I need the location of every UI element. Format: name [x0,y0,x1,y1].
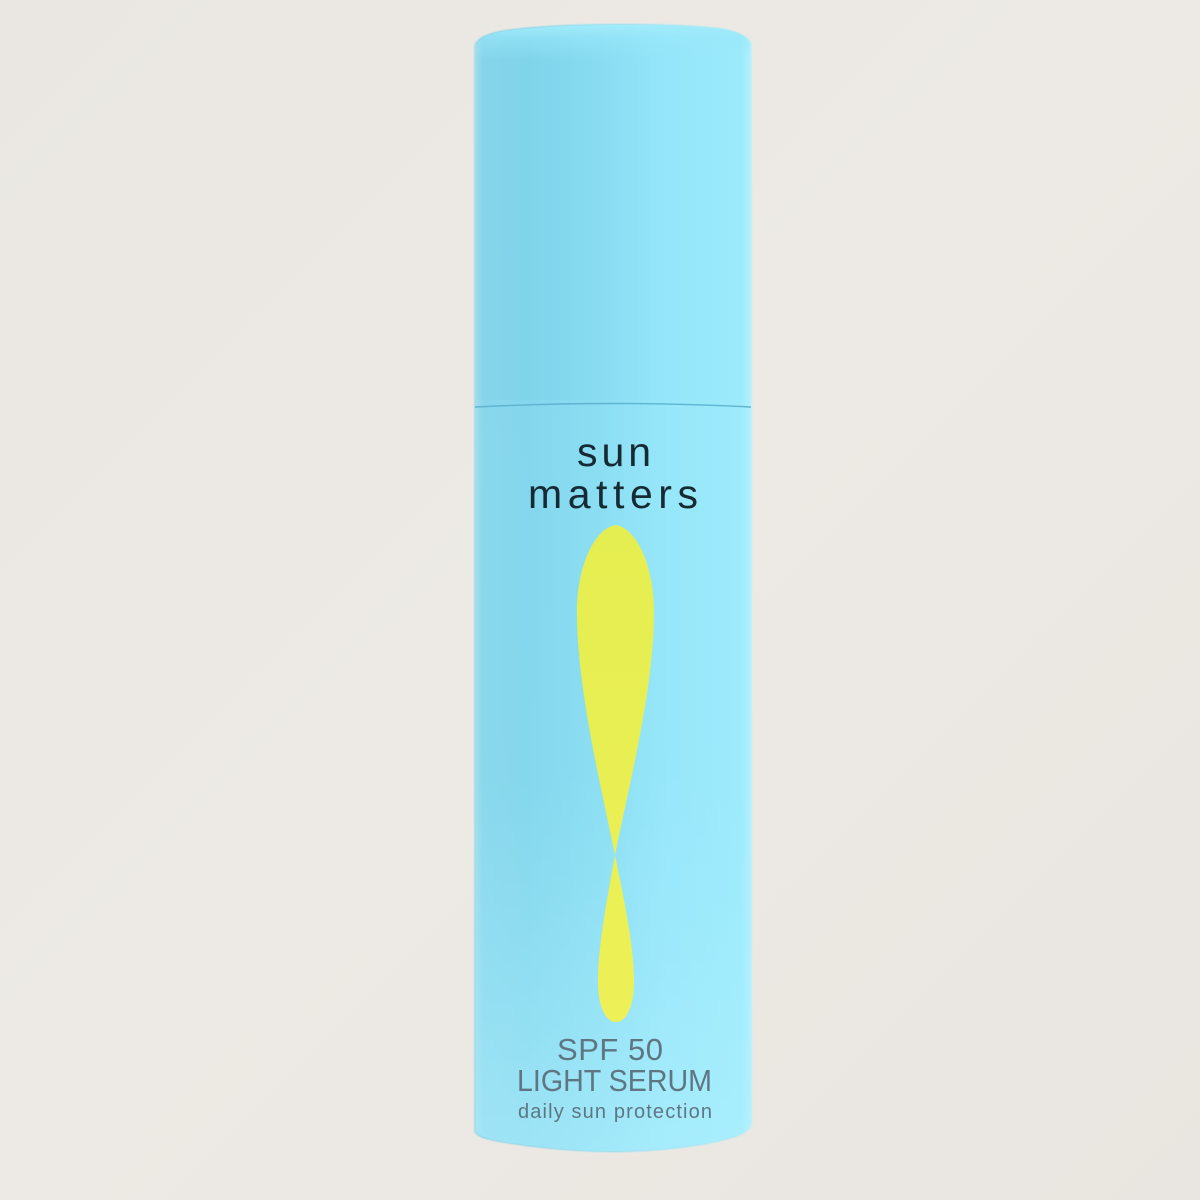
cap seam [475,404,751,407]
bottle silhouette [474,24,752,1152]
icon: yellow exclamation drop [577,525,654,1022]
matters: matters [528,471,698,517]
serum text: LIGHT SERUM [517,1063,712,1098]
cap top rim highlight [476,25,750,60]
product label [517,1032,712,1123]
brand name [528,429,698,517]
sun: sun [577,429,651,475]
body lightening [476,400,750,1151]
bottle [474,24,752,1152]
SPF text: SPF 50 [557,1032,663,1067]
tagline: daily sun protection [518,1101,712,1123]
